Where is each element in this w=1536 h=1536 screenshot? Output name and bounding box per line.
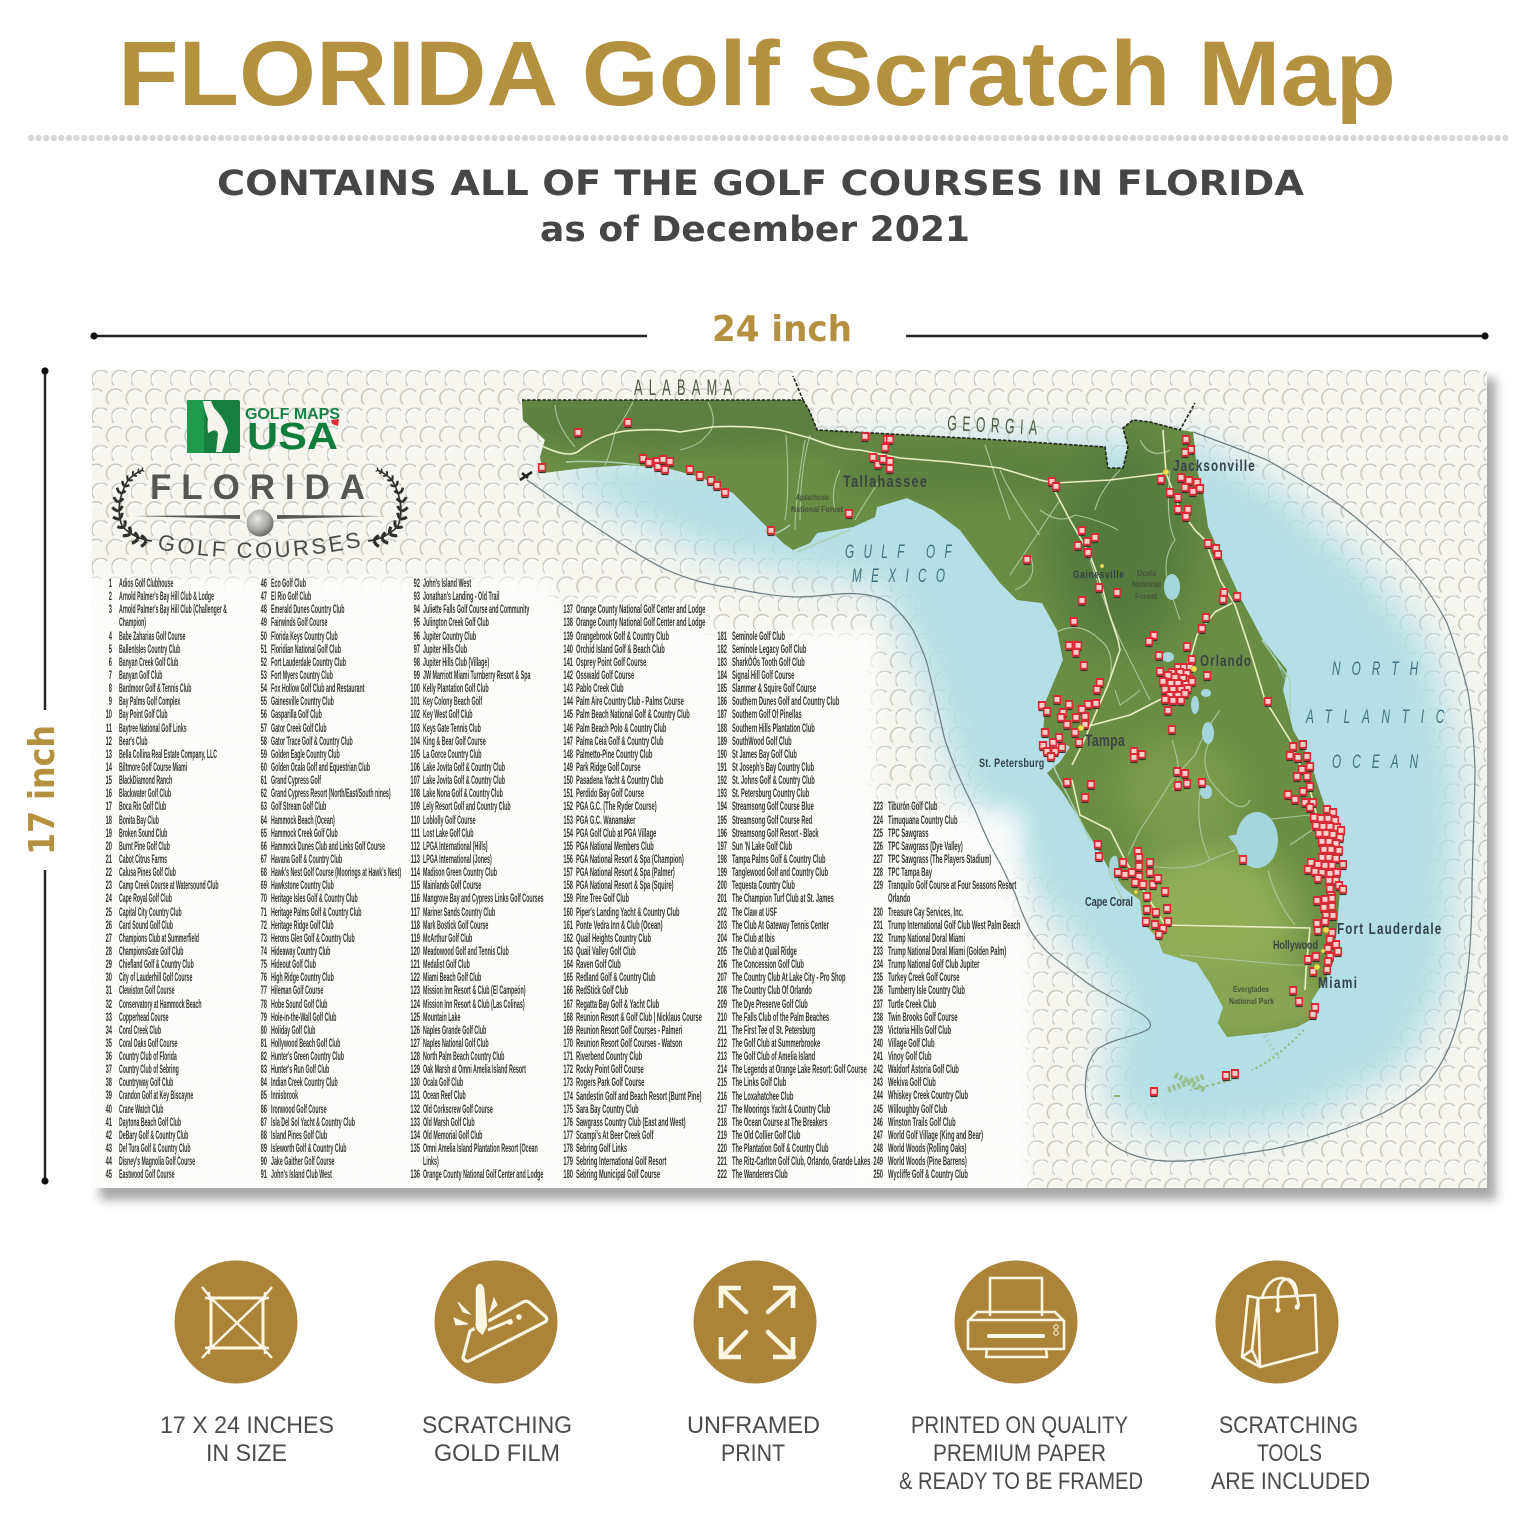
- emblem subheading: GOLF COURSES: [159, 532, 360, 558]
- feature: scratching tools: ARE INCLUDED: [1211, 1468, 1370, 1495]
- width dimension: 24 inch: 24 inch: [712, 309, 852, 350]
- city labels: [843, 457, 1442, 991]
- text: 223 224 225 226 227 228 229 230 231 232 233 234 235 236 237 238 239 240 241 242 243 244 245 246 247 248 249 250: [873, 801, 883, 1181]
- park labels: National Park: [1229, 997, 1274, 1006]
- emblem heading: FLORIDA: [150, 468, 365, 507]
- park labels: Apalachicola: [796, 493, 829, 502]
- west end marker: [520, 472, 532, 480]
- park labels: [791, 493, 1274, 1006]
- city labels: Gainesville: [1073, 569, 1125, 581]
- park labels: National Forest: [791, 505, 843, 514]
- park labels: National: [1132, 580, 1161, 589]
- city labels: Miami: [1318, 973, 1357, 991]
- coverage boundary line: [527, 432, 1475, 1161]
- park labels: Ocala: [1137, 569, 1156, 578]
- logo: Golf Maps USA: [187, 400, 340, 458]
- wreath left: [112, 468, 152, 546]
- feature: printed on quality paper: PRINTED ON QUALITY: [911, 1412, 1128, 1439]
- sea labels: GULF OF: [845, 542, 953, 563]
- city labels: Jacksonville: [1173, 457, 1255, 474]
- Florida land: [522, 400, 1340, 1037]
- golf course flags: Orlando cluster: [1156, 655, 1272, 735]
- golf course flags: Tampa cluster: [1038, 678, 1247, 865]
- height dimension: 17 inch: 17 inch: [22, 725, 63, 855]
- golf course flags: southeast coast: [1284, 740, 1347, 977]
- Florida Golf Courses emblem: [111, 467, 409, 558]
- sea glow: [535, 440, 1462, 1140]
- feature: scratching film: [422, 1260, 572, 1467]
- label: Alabama: ALABAMA: [634, 375, 732, 400]
- wreath right: [368, 468, 408, 546]
- park labels: Everglades: [1233, 985, 1269, 994]
- feature: printed on quality paper: [899, 1260, 1143, 1495]
- text: 1 2 3 4 5 6 7 8 9 10 11 12 13 14 15 16 17 18 19 20 21 22 23 24 25 26 27 28 29 30 31 32 33 34 35 36 37 38 39 40 41 42 43 44 45: [106, 578, 112, 1181]
- course list column 5: [717, 631, 870, 1181]
- city labels: Orlando: [1200, 652, 1251, 669]
- title: FLORIDA Golf Scratch Map: [118, 23, 1396, 125]
- text: Eco Golf Club El Rio Golf Club Emerald Dunes Country Club Fairwinds Golf Course Florida Keys Country Club Floridian National Golf Club Fort Lauderdale Country Club Fort Myers Country Club Fox Hollow Golf Club and Restaurant Gainesville Country Club Gasparilla Golf Club Gator Creek Golf Club Gator Trace Golf & Country Club Golden Eagle Country Club Golden Ocala Golf and Equestrian Club Grand Cypress Golf Grand Cypress Resort (North/East/South nines) Golf Stream Golf Club Hammock Beach (Ocean) Hammock Creek Golf Club Hammock Dunes Club and Links Golf Course Havana Golf & Country Club Hawk's Nest Golf Course (Moorings at Hawk's Nest) Hawkstone Country Club Heritage Isles Golf & Country Club Heritage Palms Golf & Country Club Heritage Ridge Golf Club Herons Glen Golf & Country Club Hideaway Country Club Hideout Golf Club High Ridge Country Club Hileman Golf Course Hobe Sound Golf Club Hole-in-the-Wall Golf Club Holiday Golf Club Hollywood Beach Golf Club Hunter's Green Country Club Hunter's Run Golf Club Indian Creek Country Club Innisbrook Ironwood Golf Course Isla Del Sol Yacht & Country Club Island Pines Golf Club Isleworth Golf & Country Club Jake Gaither Golf Course John's Island Club West: [271, 578, 401, 1181]
- text: 137 138 139 140 141 142 143 144 145 146 147 148 149 150 151 152 153 154 155 156 157 158 159 160 161 162 163 164 165 166 167 168 169 170 171 172 173 174 175 176 177 178 179 180: [563, 604, 573, 1181]
- sea labels: MEXICO: [852, 566, 945, 587]
- poster shadow: [100, 378, 1496, 1200]
- Florida Keys: [1114, 1030, 1304, 1096]
- sea labels: [845, 542, 1445, 773]
- golf course flags: panhandle: [538, 418, 894, 536]
- white list background: [60, 578, 1026, 1230]
- course list column 2: [260, 578, 401, 1181]
- feature: unframed: [687, 1260, 820, 1467]
- feature: size: IN SIZE: [206, 1440, 287, 1467]
- feature: size: [160, 1260, 334, 1467]
- text: 181 182 183 184 185 186 187 188 189 190 191 192 193 194 195 196 197 198 199 200 201 202 203 204 205 206 207 208 209 210 211 212 213 214 215 216 217 218 219 220 221 222: [717, 631, 727, 1181]
- text: 92 93 94 95 96 97 98 99 100 101 102 103 104 105 106 107 108 109 110 111 112 113 114 115 116 117 118 119 120 121 122 123 124 125 126 127 128 129 130 131 132 133 134 135 136: [410, 578, 420, 1181]
- logo: Golf Maps USA: GOLF MAPS: [245, 406, 340, 423]
- state borders: [522, 376, 1195, 468]
- poster panel: [92, 370, 1487, 1188]
- feature: unframed: UNFRAMED: [687, 1412, 820, 1439]
- golf course flags: Cape Coral cluster: [1094, 840, 1172, 940]
- golf course flags: Keys and south tip: [1150, 986, 1319, 1097]
- width dimension: 24 inch: [90, 309, 1489, 350]
- golf ball: [246, 510, 274, 536]
- city labels: Tallahassee: [843, 472, 927, 492]
- text: Seminole Golf Club Seminole Legacy Golf Club SharkÖÖs Tooth Golf Club Signal Hill Golf Course Slammer & Squire Golf Course Southern Dunes Golf and Country Club Southern Golf Of Pinellas Southern Hills Plantation Club SouthWood Golf Club St James Bay Golf Club St Joseph's Bay Country Club St. Johns Golf & Country Club St. Petersburg Country Club Streamsong Golf Course Blue Streamsong Golf Course Red Streamsong Golf Resort - Black Sun 'N Lake Golf Club Tampa Palms Golf & Country Club Tanglewood Golf and Country Club Tequesta Country Club The Champion Turf Club at St. James The Claw at USF The Club At Gateway Tennis Center The Club at Ibis The Club at Quail Ridge The Concession Golf Club The Country Club At Lake City - Pro Shop The Country Club Of Orlando The Dye Preserve Golf Club The Falls Club of the Palm Beaches The First Tee of St. Petersburg The Golf Club at Summerbrooke The Golf Club of Amelia Island The Legends at Orange Lake Resort: Golf Course The Links Golf Club The Loxahatchee Club The Moorings Yacht & Country Club The Ocean Course at The Breakers The Old Collier Golf Club The Plantation Golf & Country Club The Ritz-Carlton Golf Club, Orlando, Grande Lakes The Wanderers Club: [732, 631, 870, 1181]
- text: 46 47 48 49 50 51 52 53 54 55 56 57 58 59 60 61 62 63 64 65 66 67 68 69 70 71 72 73 74 75 76 77 78 79 80 81 82 83 84 85 86 87 88 89 90 91: [261, 578, 267, 1181]
- city labels: Hollywood: [1273, 939, 1318, 952]
- feature: printed on quality paper: & READY TO BE FRAMED: [899, 1468, 1143, 1495]
- course list column 6: [873, 801, 1020, 1181]
- feature: scratching tools: SCRATCHING: [1219, 1412, 1358, 1439]
- city labels: Tampa: [1085, 732, 1126, 751]
- course list column 4: [563, 604, 706, 1181]
- city labels: Cape Coral: [1085, 896, 1133, 909]
- lakes: [1109, 574, 1290, 893]
- park labels: Forest: [1135, 592, 1157, 601]
- feature: printed on quality paper: PREMIUM PAPER: [933, 1440, 1106, 1467]
- state labels: [634, 380, 1037, 435]
- course list column 1: [106, 578, 227, 1181]
- city labels: Fort Lauderdale: [1337, 920, 1442, 937]
- highways: [540, 426, 1318, 990]
- rivers: [555, 402, 1315, 965]
- subtitle line 1: CONTAINS ALL OF THE GOLF COURSES IN FLORIDA: [217, 164, 1304, 204]
- feature: unframed: PRINT: [721, 1440, 785, 1467]
- feature: size: 17 X 24 INCHES: [160, 1412, 334, 1439]
- city labels: St. Petersburg: [979, 757, 1044, 770]
- text: Orange County National Golf Center and Lodge Orange County National Golf Center and Lodge Orangebrook Golf & Country Club Orchid Island Golf & Beach Club Osprey Point Golf Course Osswald Golf Course Pablo Creek Club Palm Aire Country Club - Palms Course Palm Beach National Golf & Country Club Palm Beach Polo & Country Club Palma Ceia Golf & Country Club Palmetto-Pine Country Club Park Ridge Golf Course Pasadena Yacht & Country Club Perdido Bay Golf Course PGA G.C. (The Ryder Course) PGA G.C. Wanamaker PGA Golf Club at PGA Village PGA National Members Club PGA National Resort & Spa (Champion) PGA National Resort & Spa (Palmer) PGA National Resort & Spa (Squire) Pine Tree Golf Club Piper's Landing Yacht & Country Club Ponte Vedra Inn & Club (Ocean) Quail Heights Country Club Quail Valley Golf Club Raven Golf Club Redland Golf & Country Club RedStick Golf Club Regatta Bay Golf & Yacht Club Reunion Resort & Golf Club | Nicklaus Course Reunion Resort Golf Courses - Palmeri Reunion Resort Golf Courses - Watson Riverbend Country Club Rocky Point Golf Course Rogers Park Golf Course Sandestin Golf and Beach Resort (Burnt Pine) Sara Bay Country Club Sawgrass Country Club (East and West) Scampi's At Beer Creek Golf Sebring Golf Links Sebring International Golf Resort Sebring Municipal Golf Course: [576, 604, 705, 1181]
- sea labels: OCEAN: [1332, 752, 1419, 773]
- subtitle line 2: as of December 2021: [540, 210, 970, 250]
- text: Tiburón Golf Club Timuquana Country Club TPC Sawgrass TPC Sawgrass (Dye Valley) TPC Sawgrass (The Players Stadium) TPC Tampa Bay Tranquilo Golf Course at Four Seasons Resort Orlando Treasure Cay Services, Inc. Trump International Golf Club West Palm Beach Trump National Doral Miami Trump National Doral Miami (Golden Palm) Trump National Golf Club Jupiter Turkey Creek Golf Course Turnberry Isle Country Club Turtle Creek Club Twin Brooks Golf Course Victoria Hills Golf Club Village Golf Club Vinoy Golf Club Waldorf Astoria Golf Club Wekiva Golf Club Whiskey Creek Country Club Willoughby Golf Club Winston Trails Golf Club World Golf Village (King and Bear) World Woods (Rolling Oaks) World Woods (Pine Barrens) Wycliffe Golf & Country Club: [888, 801, 1020, 1181]
- feature: scratching film: SCRATCHING: [422, 1412, 572, 1439]
- label: Georgia: GEORGIA: [947, 410, 1038, 440]
- sea labels: ATLANTIC: [1305, 707, 1445, 728]
- text: John's Island West Jonathan's Landing - Old Trail Juliette Falls Golf Course and Community Julington Creek Golf Club Jupiter Country Club Jupiter Hills Club Jupiter Hills Club (Village) JW Marriott Miami Turnberry Resort & Spa Kelly Plantation Golf Club Key Colony Beach Golf Key West Golf Club Keys Gate Tennis Club King & Bear Golf Course La Gorce Country Club Lake Jovita Golf & Country Club Lake Jovita Golf & Country Club Lake Nona Golf & Country Club Lely Resort Golf and Country Club Loblolly Golf Course Lost Lake Golf Club LPGA International (Hills) LPGA International (Jones) Madison Green Country Club Mainlands Golf Course Mangrove Bay and Cypress Links Golf Courses Mariner Sands Country Club Mark Bostick Golf Course McArthur Golf Club Meadowood Golf and Tennis Club Medalist Golf Club Miami Beach Golf Club Mission Inn Resort & Club (El Campeón) Mission Inn Resort & Club (Las Colinas) Mountain Lake Naples Grande Golf Club Naples National Golf Club North Palm Beach Country Club Oak Marsh at Omni Amelia Island Resort Ocala Golf Club Ocean Reef Club Old Corkscrew Golf Course Old Marsh Golf Club Old Memorial Golf Club Omni Amelia Island Plantation Resort (Ocean Links) Orange County National Golf Center and Lodge: [423, 578, 544, 1181]
- barrier islands and bays: [566, 461, 1290, 905]
- feature: scratching tools: TOOLS: [1257, 1440, 1322, 1467]
- course list column 3: [410, 578, 544, 1181]
- logo: Golf Maps USA: USA: [247, 416, 338, 458]
- sea labels: NORTH: [1332, 659, 1419, 680]
- golf course flags: north Florida: [1023, 435, 1241, 671]
- feature: scratching film: GOLD FILM: [434, 1440, 560, 1467]
- text: Adios Golf Clubhouse Arnold Palmer's Bay Hill Club & Lodge Arnold Palmer's Bay Hill Club (Challenger & Champion) Babe Zaharias Golf Course BallenIsles Country Club Banyan Creek Golf Club Banyan Golf Club Bardmoor Golf & Tennis Club Bay Palms Golf Complex Bay Point Golf Club Baytree National Golf Links Bear's Club Bella Collina Real Estate Company, LLC Biltmore Golf Course Miami BlackDiamond Ranch Blackwater Golf Club Boca Rio Golf Club Bonita Bay Club Broken Sound Club Burnt Pine Golf Club Cabot Citrus Farms Calusa Pines Golf Club Camp Creek Course at Watersound Club Cape Royal Golf Club Capital City Country Club Card Sound Golf Club Champions Club at Summerfield ChampionsGate Golf Club Chiefland Golf & Country Club City of Lauderhill Golf Course Clewiston Golf Course Conservatory at Hammock Beach Copperhead Course Coral Creek Club Coral Oaks Golf Course Country Club of Florida Country Club of Sebring Countryway Golf Club Crandon Golf at Key Biscayne Crane Watch Club Daytona Beach Golf Club DeBary Golf & Country Club Del Tura Golf & Country Club Disney's Magnolia Golf Course Eastwood Golf Course: [119, 578, 227, 1181]
- city markers: [1078, 469, 1329, 970]
- feature: scratching tools: [1211, 1260, 1370, 1495]
- height dimension: 17 inch: [20, 367, 70, 1185]
